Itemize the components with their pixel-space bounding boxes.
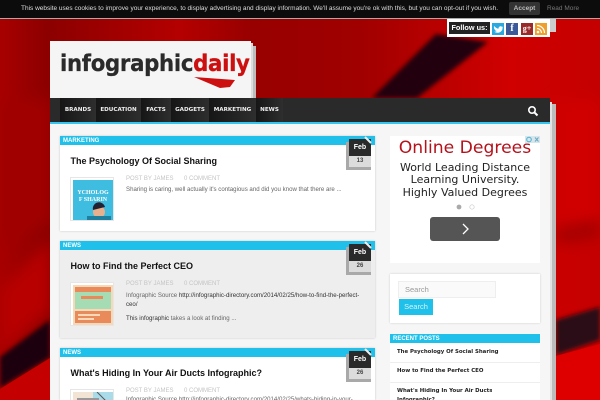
icon: twitter (492, 23, 504, 35)
search input: Search (405, 285, 429, 294)
ad body text: World Leading Distance (400, 160, 530, 174)
post title: What's Hiding In Your Air Ducts Infographic? (70, 368, 262, 378)
search button: Search (404, 302, 428, 311)
nav item: gadgets: GADGETS (175, 107, 205, 113)
widget heading: RECENT POSTS (393, 336, 440, 342)
recent post link: How to Find the Perfect CEO (397, 368, 483, 374)
nav item: news: NEWS (260, 107, 279, 113)
post meta (126, 176, 220, 182)
search input (398, 281, 496, 298)
ad body text (400, 160, 530, 198)
icon: facebook (506, 23, 518, 35)
date badge: 26 (357, 370, 363, 376)
logo red swoosh (194, 77, 235, 88)
widget heading (390, 334, 540, 342)
nav item: gadgets (171, 98, 209, 122)
post meta (126, 280, 220, 286)
nav item: education (96, 98, 141, 122)
nav item: brands: BRANDS (65, 107, 91, 113)
date badge (346, 136, 372, 170)
post excerpt: Sharing is caring, well actually it's contagious and did you know that there are ... (126, 186, 342, 193)
category bar (60, 136, 375, 145)
ad pagination dots (456, 204, 474, 210)
accept button (509, 2, 540, 15)
post meta: POST BY JAMES (126, 176, 173, 182)
ad info icons (525, 136, 540, 143)
nav item: marketing (209, 98, 256, 122)
icon: rss (535, 23, 547, 35)
post title: How to Find the Perfect CEO (70, 260, 193, 270)
post excerpt (126, 292, 359, 308)
ad headline: Online Degrees (399, 138, 531, 158)
date badge: Feb (354, 144, 366, 151)
post card: psychology of social sharing: 0 COMMENT (184, 176, 220, 182)
post meta: POST BY JAMES (126, 388, 173, 394)
cookie notice bar (0, 0, 600, 19)
post meta (126, 388, 220, 394)
post thumbnail (70, 389, 114, 400)
category bar (60, 348, 375, 357)
post card: psychology of social sharing (60, 136, 375, 231)
nav item: facts (141, 98, 171, 122)
accept button: Accept (514, 5, 535, 12)
search button (399, 299, 433, 315)
ad body text: Learning University. (411, 173, 519, 186)
category bar: MARKETING (63, 138, 99, 144)
advertisement panel (390, 136, 540, 263)
date badge (346, 241, 372, 275)
category bar: NEWS (63, 350, 81, 356)
recent post link: What's Hiding In Your Air Ducts (397, 388, 492, 394)
main content column (50, 102, 556, 400)
date badge: Feb (354, 356, 366, 363)
post thumbnail: F SHARIN (79, 197, 108, 203)
post excerpt second paragraph: This infographic takes a look at finding ... (126, 315, 236, 322)
post excerpt: Infographic Source http://infographic-directory.com/2014/02/25/how-to-find-the-perfect- (126, 292, 359, 299)
logo panel (50, 41, 256, 98)
icon: google plus: g+ (523, 24, 531, 33)
date badge: 13 (357, 158, 363, 164)
follow us social box (447, 19, 556, 37)
post card: air ducts infographic: 0 COMMENT (184, 388, 220, 394)
post meta: POST BY JAMES (126, 280, 173, 286)
icon: facebook: f (510, 23, 514, 34)
nav item: marketing: MARKETING (214, 107, 251, 113)
post excerpt: ceo/ (126, 301, 138, 308)
nav item: news (256, 98, 283, 122)
search widget (390, 274, 540, 323)
logo wordmark: infographicdaily (60, 49, 250, 77)
post thumbnail: YCHOLOG (77, 190, 109, 196)
post card: air ducts infographic (60, 348, 375, 400)
recent post link (397, 388, 492, 400)
recent post link: The Psychology Of Social Sharing (397, 348, 499, 354)
nav item: education: EDUCATION (100, 107, 137, 113)
nav item: brands (60, 98, 96, 122)
date badge: Feb (354, 249, 366, 256)
post card: how to find the perfect ceo (60, 241, 375, 338)
post thumbnail (70, 177, 114, 221)
read more link: Read More (547, 5, 579, 12)
date badge (346, 348, 372, 382)
category bar: NEWS (63, 243, 81, 249)
post thumbnail (70, 282, 114, 326)
cookie notice text: This website uses cookies to improve your experience, to display advertising and display information. We'll assume you're ok with this, but you can opt-out if you wish. (21, 5, 498, 12)
icon: google plus (521, 23, 533, 35)
ad body text: Highly Valued Degrees (403, 186, 527, 198)
follow us label (449, 22, 490, 34)
icon: search (528, 106, 538, 116)
post title: The Psychology Of Social Sharing (70, 156, 217, 166)
recent posts widget (390, 334, 540, 400)
category bar (60, 241, 375, 250)
ad arrow button (430, 217, 500, 241)
post card: how to find the perfect ceo: 0 COMMENT (184, 280, 220, 286)
follow us label: Follow us: (451, 23, 488, 32)
nav item: facts: FACTS (146, 107, 166, 113)
navigation bar (50, 98, 550, 124)
date badge: 26 (357, 263, 363, 269)
